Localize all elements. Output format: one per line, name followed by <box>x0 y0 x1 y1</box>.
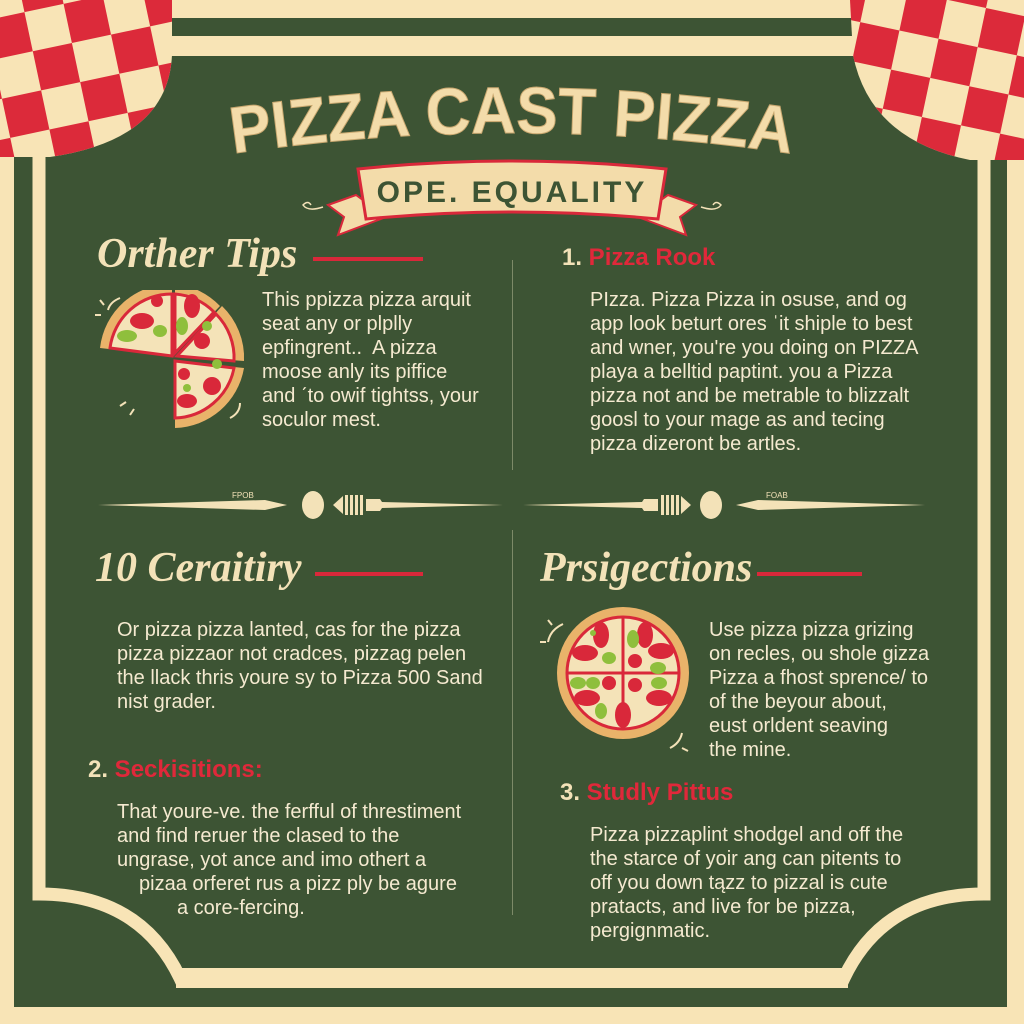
text: Pizza Rook body: PIzza. Pizza Pizza in osuse, and og <box>590 289 907 311</box>
text: Prsigections body: Pizza a fhost sprence/ to <box>709 667 928 689</box>
text: Ceraitiry body <box>117 619 483 713</box>
icon: whole pizza <box>540 607 689 752</box>
text: Ceraitiry body: nist grader. <box>117 691 216 713</box>
text: Seckisitions body: That youre-ve. the ferfful of threstiment <box>117 801 461 823</box>
text: Prsigections body: the mine. <box>709 739 791 761</box>
text: Prsigections body: eust orldent seaving <box>709 715 888 737</box>
checkered corner right <box>850 0 1024 160</box>
text: Studly Pittus body: pratacts, and live for be pizza, <box>590 896 856 918</box>
text: Seckisitions body: ungrase, yot ance and imo othert a <box>117 849 426 871</box>
text: Orther Tips body <box>262 289 479 431</box>
checkered corner left <box>0 0 172 157</box>
text: Seckisitions body <box>117 801 462 919</box>
text: Pizza Rook body <box>590 289 918 455</box>
text: Pizza Rook body: playa a belltid paptint. you a Pizza <box>590 361 892 383</box>
text: Prsigections body: Use pizza pizza grizing <box>709 619 914 641</box>
text: Studly Pittus body: Pizza pizzaplint shodgel and off the <box>590 824 903 846</box>
text: Pizza Rook body: and wner, you're you doing on PIZZA <box>590 337 918 359</box>
text: Prsigections body <box>709 619 930 761</box>
text: Prsigections body: of the beyour about, <box>709 691 887 713</box>
divider vertical <box>512 260 513 470</box>
text: Ceraitiry body: pizza pizzaor not cradces, pizzag pelen <box>117 643 466 665</box>
text: Studly Pittus body: off you down tązz to pizzal is cute <box>590 872 888 894</box>
ornament dividers <box>99 491 924 519</box>
text: Studly Pittus body: pergignmatic. <box>590 920 710 942</box>
heading: Prsigections: Prsigections <box>540 545 752 591</box>
text: Orther Tips body: moose anly its piffice <box>262 361 447 383</box>
text: Ceraitiry body: the llack thris youre sy to Pizza 500 Sand <box>117 667 483 689</box>
text: Studly Pittus body <box>590 824 903 942</box>
banner subtitle: OPE. EQUALITY <box>377 176 647 209</box>
heading: Orther Tips: Orther Tips <box>97 231 297 277</box>
ornament dividers: FPOB <box>232 491 254 500</box>
text: Pizza Rook body: pizza dizeront be artles. <box>590 433 801 455</box>
banner subtitle <box>302 160 722 236</box>
text: Pizza Rook body: pizza not and be metrable to blizzalt <box>590 385 909 407</box>
heading: 2. Seckisitions: 2. Seckisitions: <box>88 756 263 783</box>
heading: 1. Pizza Rook: 1. Pizza Rook <box>562 244 715 271</box>
text: Orther Tips body: soculor mest. <box>262 409 381 431</box>
text: Orther Tips body: seat any or plplly <box>262 313 412 335</box>
text: Pizza Rook body: goosl to your mage as and tecing <box>590 409 885 431</box>
ornament dividers: FOAB <box>766 491 788 500</box>
text: Seckisitions body: a core-fercing. <box>177 897 305 919</box>
text: Orther Tips body: and ˊto owif tightss, your <box>262 385 479 407</box>
text: Ceraitiry body: Or pizza pizza lanted, cas for the pizza <box>117 619 460 641</box>
text: Prsigections body: on recles, ou shole gizza <box>709 643 929 665</box>
text: Orther Tips body: This ppizza pizza arquit <box>262 289 471 311</box>
text: Seckisitions body: and find reruer the clased to the <box>117 825 399 847</box>
text: Seckisitions body: pizaa orferet rus a pizz ply be agure <box>139 873 457 895</box>
text: Pizza Rook body: app look beturt ores ˈit shiple to best <box>590 313 912 335</box>
text: Studly Pittus body: the starce of yoir ang can pitents to <box>590 848 901 870</box>
icon: pizza sliced <box>95 290 244 428</box>
heading: 3. Studly Pittus: 3. Studly Pittus <box>560 779 733 806</box>
text: Orther Tips body: epfingrent.. A pizza <box>262 337 437 359</box>
heading: 10 Ceraitiry: 10 Ceraitiry <box>95 545 302 591</box>
